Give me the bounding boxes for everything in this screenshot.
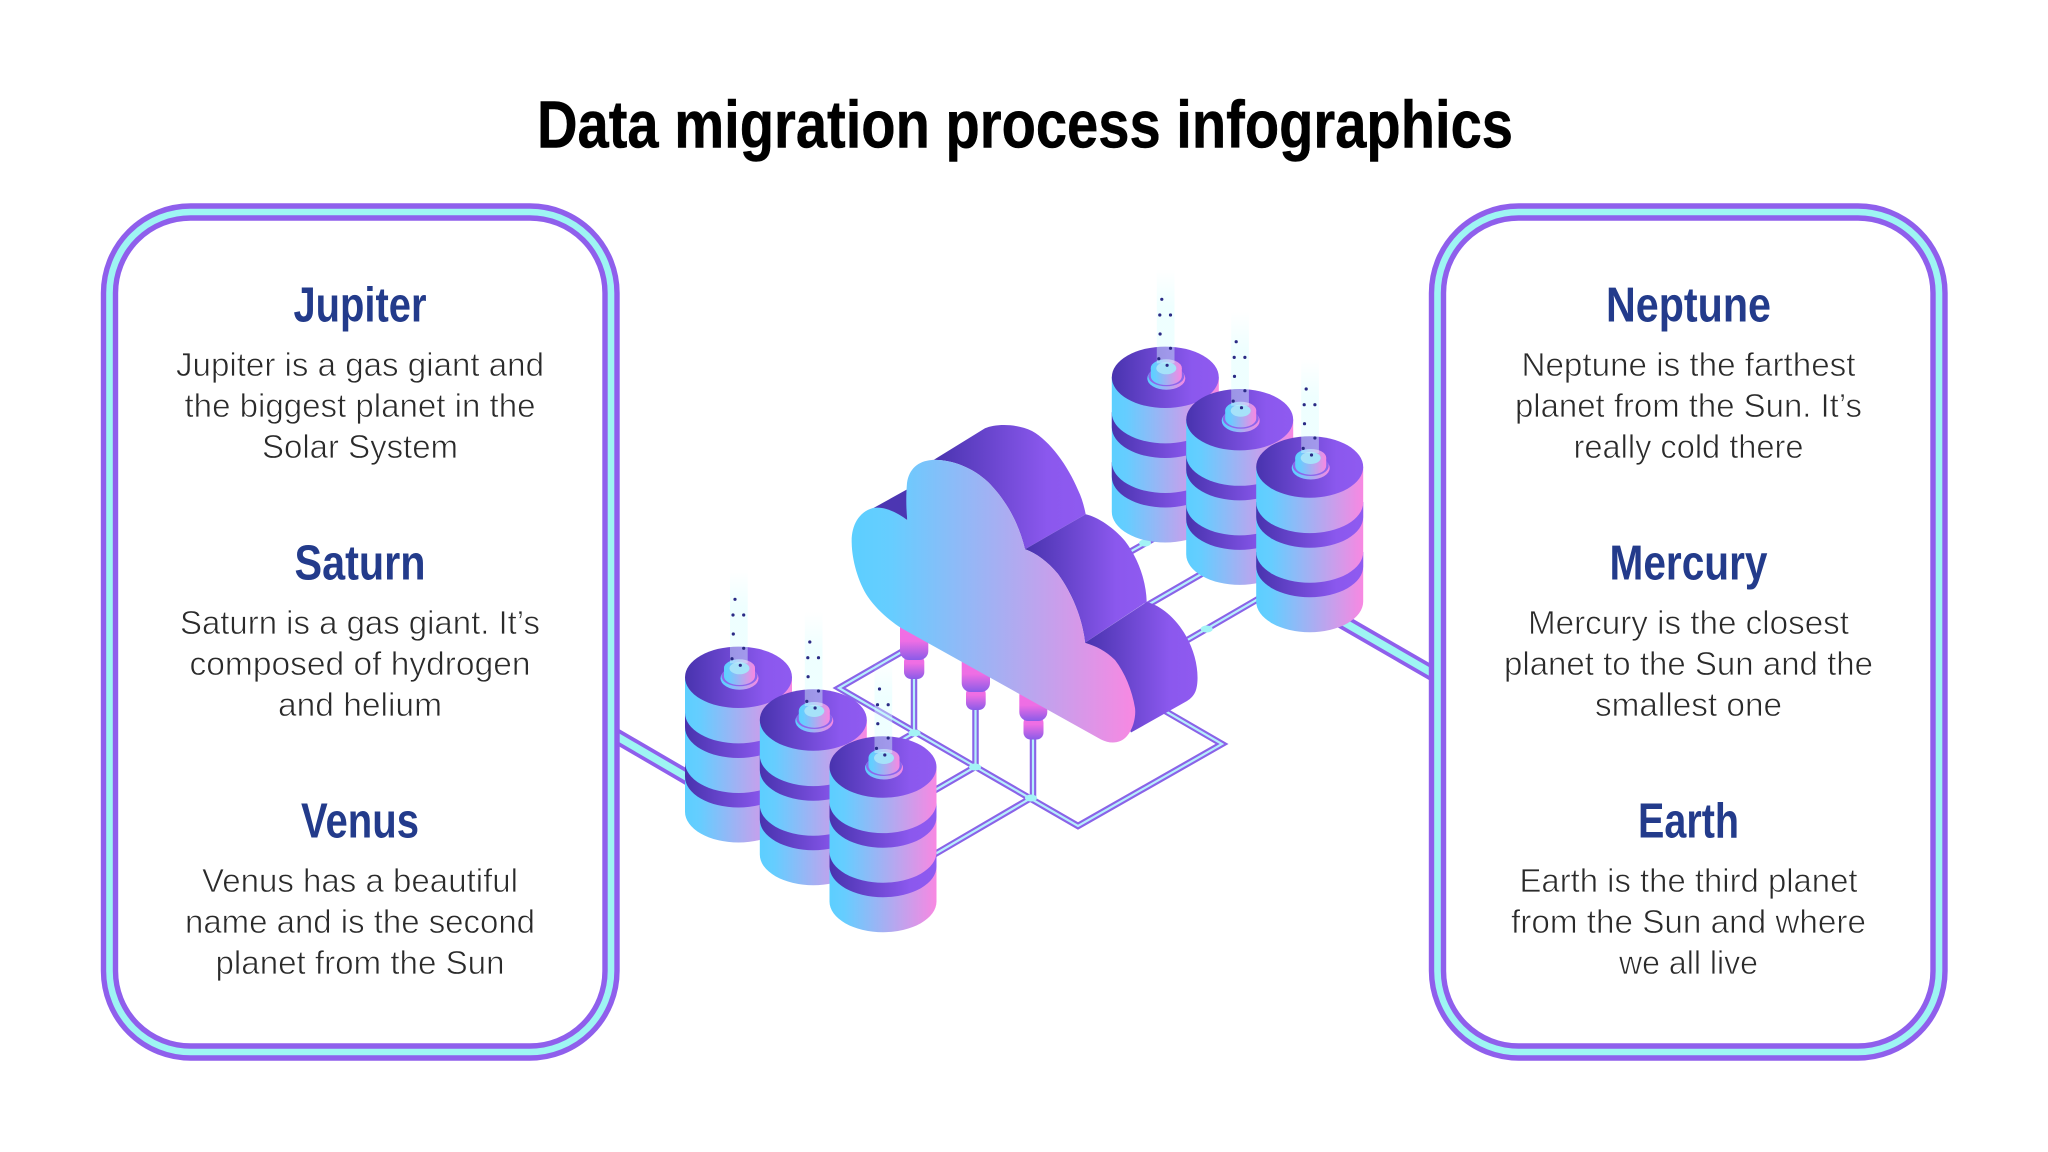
text block: Mercury: smallest one [1595,686,1782,723]
text block: Venus: name and is the second [185,903,535,940]
circuit wires [839,535,1265,857]
heading: Neptune: Neptune [1606,279,1771,333]
heading: Mercury: Mercury [1610,537,1768,591]
text block: Saturn [180,604,540,723]
text block: Earth [1511,862,1866,981]
heading: Earth: Earth [1638,794,1739,848]
text block: Mercury [1504,604,1873,723]
text block: Saturn: composed of hydrogen [190,645,530,682]
text block: Earth: we all live [1618,944,1758,981]
icon: left database group [685,569,936,932]
text block: Neptune: Neptune is the farthest [1522,346,1856,383]
connector: right panel to servers [1340,620,1437,676]
heading: Jupiter: Jupiter [294,279,426,333]
cloud connector plugs [900,618,1047,740]
text block: Neptune: really cold there [1574,428,1804,465]
text block: Saturn: and helium [278,686,442,723]
text block: Jupiter: Solar System [262,428,458,465]
text block: Neptune [1515,346,1862,465]
panel: left [110,212,611,1052]
heading: Saturn: Saturn [294,537,426,591]
text block: Mercury: Mercury is the closest [1528,604,1849,641]
panel: right [1438,212,1939,1052]
title: Data migration process infographics [537,88,1513,162]
text block: Mercury: planet to the Sun and the [1504,645,1873,682]
text block: Venus: planet from the Sun [216,944,504,981]
connector: left panel to servers [611,733,690,779]
text block: Jupiter: Jupiter is a gas giant and [176,346,544,383]
text block: Saturn: Saturn is a gas giant. It’s [180,604,540,641]
text block: Jupiter [176,346,544,465]
icon: cloud [852,425,1198,743]
text block: Jupiter: the biggest planet in the [184,387,536,424]
text block: Neptune: planet from the Sun. It’s [1515,387,1862,424]
icon: right database group [1112,269,1363,632]
text block: Earth: Earth is the third planet [1520,862,1858,899]
heading: Venus: Venus [301,794,419,848]
text block: Venus: Venus has a beautiful [202,862,518,899]
text block: Venus [185,862,535,981]
text block: Earth: from the Sun and where [1511,903,1866,940]
